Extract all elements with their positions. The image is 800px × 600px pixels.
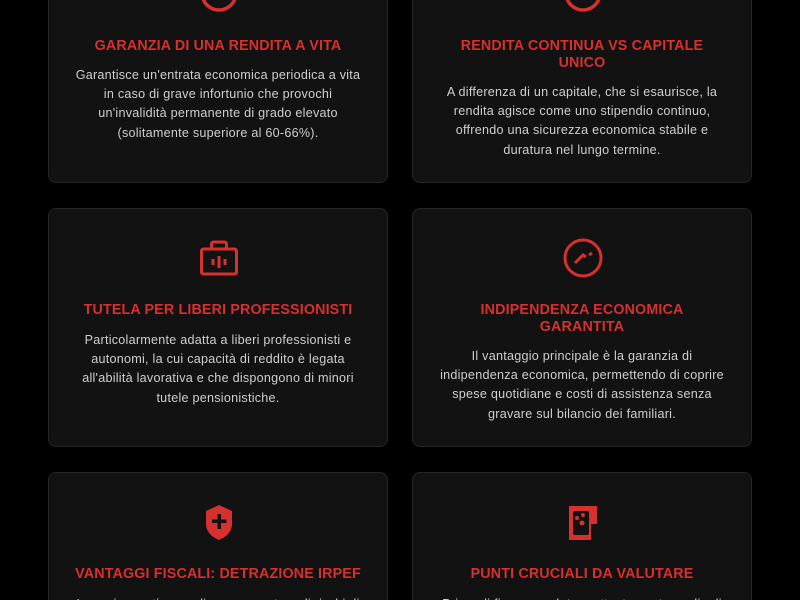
card: rendita a vita bbox=[48, 0, 388, 183]
title: INDIPENDENZA ECONOMICA bbox=[481, 302, 683, 318]
title: RENDITA CONTINUA VS CAPITALE bbox=[461, 38, 703, 54]
title: VANTAGGI FISCALI: DETRAZIONE IRPEF bbox=[75, 566, 361, 582]
title: UNICO bbox=[559, 55, 605, 71]
card: indipendenza economica bbox=[412, 208, 752, 447]
text: (solitamente superiore al 60-66%). bbox=[118, 126, 318, 140]
title: TUTELA PER LIBERI PROFESSIONISTI bbox=[84, 302, 352, 318]
title: GARANTITA bbox=[540, 319, 624, 335]
text: spese quotidiane e costi di assistenza senza bbox=[452, 387, 712, 401]
title bbox=[481, 302, 683, 335]
title bbox=[461, 38, 703, 71]
text: A differenza di un capitale, che si esaurisce, la bbox=[447, 85, 717, 99]
title: PUNTI CRUCIALI DA VALUTARE bbox=[471, 566, 693, 582]
text: tutele pensionistiche. bbox=[156, 391, 280, 405]
text: Garantisce un'entrata economica periodica a vita bbox=[76, 68, 360, 82]
icon: briefcase bbox=[200, 240, 238, 276]
card: punti cruciali bbox=[412, 472, 752, 600]
card: vantaggi fiscali bbox=[48, 472, 388, 600]
text: indipendenza economica, permettendo di coprire bbox=[440, 368, 724, 382]
icon: shield bbox=[206, 505, 232, 540]
text bbox=[446, 85, 717, 157]
text: all'abilità lavorativa e che dispongono di minori bbox=[82, 371, 354, 385]
icon: circle bbox=[566, 0, 600, 12]
title: GARANZIA DI UNA RENDITA A VITA bbox=[95, 38, 341, 54]
icon: circle bbox=[202, 0, 236, 12]
card: rendita vs capitale bbox=[412, 0, 752, 183]
text: in caso di grave infortunio che provochi bbox=[104, 87, 332, 101]
icon: device bbox=[569, 506, 597, 540]
card: liberi professionisti bbox=[48, 208, 388, 447]
text: rendita agisce come uno stipendio continuo, bbox=[454, 104, 710, 118]
text: duratura nel lungo termine. bbox=[503, 143, 661, 157]
text bbox=[440, 349, 724, 421]
text: Particolarmente adatta a liberi professionisti e bbox=[85, 333, 351, 347]
text: Il vantaggio principale è la garanzia di bbox=[472, 349, 692, 363]
text bbox=[82, 333, 354, 405]
text: un'invalidità permanente di grado elevato bbox=[98, 106, 338, 120]
text bbox=[76, 68, 360, 140]
text: offrendo una sicurezza economica stabile e bbox=[456, 123, 708, 137]
icon: gauge circle bbox=[564, 238, 602, 278]
text: autonomi, la cui capacità di reddito è legata bbox=[91, 352, 345, 366]
text: gravare sul bilancio dei familiari. bbox=[488, 407, 676, 421]
